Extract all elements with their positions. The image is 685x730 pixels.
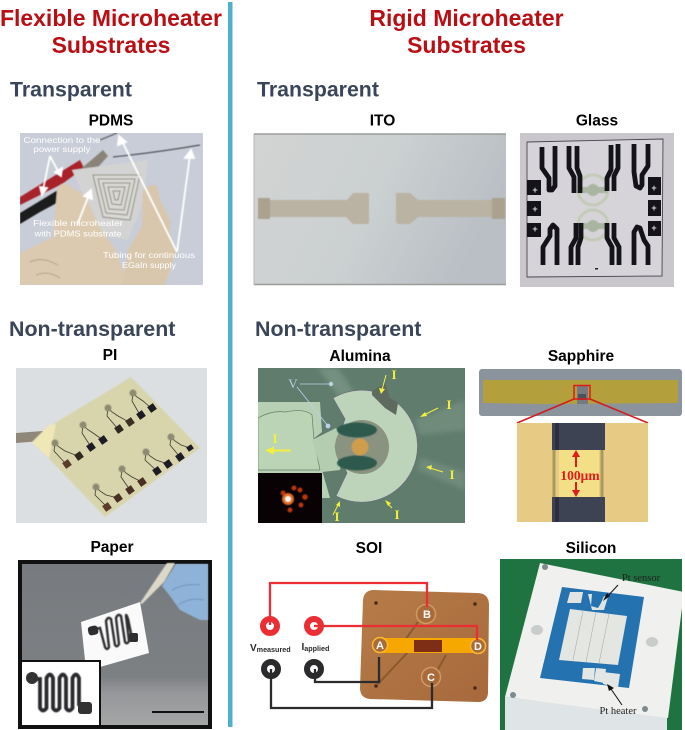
label: Silicon: Silicon (566, 540, 616, 557)
label: ITO: ITO (370, 112, 395, 130)
SOI I applied label: I (302, 642, 304, 653)
photo: silicon microheater (500, 559, 684, 730)
photo: glass microheater: + (532, 204, 538, 214)
SOI I applied label: applied (304, 644, 329, 653)
photo: alumina microheater: I (334, 509, 340, 524)
heading: non-transparent (rigid): Non-transparent (255, 317, 421, 341)
SOI chip (360, 590, 489, 702)
photo: PDMS microheater: with PDMS substrate (33, 228, 122, 238)
title: flexible microheater substrates: Flexible Microheater (0, 5, 222, 31)
photo: glass microheater: + (651, 183, 657, 193)
sapphire scale label: 100μm (560, 468, 600, 483)
photo: sapphire zoomed detail (517, 386, 648, 522)
photo: silicon microheater: Pt sensor (622, 573, 661, 584)
SOI V measured label: V (250, 643, 257, 654)
label: Alumina: Alumina (329, 348, 391, 365)
title: rigid microheater substrates: Substrates (407, 32, 526, 58)
photo: glass microheater: + (532, 224, 538, 234)
title: rigid microheater substrates: Rigid Microheater (369, 5, 564, 31)
SOI terminals (263, 619, 321, 676)
SOI wiring (270, 583, 477, 708)
heading: transparent (flexible): Transparent (10, 78, 132, 102)
photo: sapphire chip overview (479, 369, 682, 416)
photo: glass microheater: + (651, 203, 657, 213)
photo: glass microheater: + (532, 185, 538, 195)
SOI diagram (250, 583, 489, 708)
SOI node letters: D (474, 641, 482, 653)
label: Sapphire: Sapphire (548, 348, 615, 365)
photo: glass microheater: + (651, 223, 657, 233)
photo: alumina microheater: I (391, 367, 397, 382)
SOI V measured label: measured (257, 645, 291, 654)
photo: PDMS microheater (20, 133, 203, 285)
photo: PDMS microheater: EGaIn supply (122, 260, 177, 270)
SOI node letters (376, 609, 482, 684)
title: flexible microheater substrates: Substrates (52, 32, 170, 58)
title: rigid microheater substrates (369, 5, 564, 58)
photo: alumina microheater: I (394, 507, 400, 522)
divider line (228, 2, 232, 727)
title: flexible microheater substrates (0, 5, 222, 58)
photo: silicon microheater: Pt heater (599, 706, 637, 717)
photo: alumina microheater: I (446, 397, 452, 412)
alumina voltage label: V (288, 376, 298, 391)
label: PDMS: PDMS (89, 112, 133, 130)
heading: non-transparent (flexible): Non-transparent (9, 317, 175, 341)
photo: PDMS microheater: Connection to the (24, 135, 101, 145)
SOI node letters: A (376, 640, 384, 652)
photo: alumina microheater: I (272, 431, 278, 446)
label: Glass: Glass (576, 112, 618, 130)
label: Paper: Paper (90, 539, 134, 556)
photo: alumina microheater (258, 367, 465, 524)
label: SOI: SOI (356, 540, 382, 557)
photo: glass microheater (520, 133, 674, 287)
label: PI: PI (103, 347, 117, 364)
photo: PI microheater (16, 368, 207, 523)
photo: alumina microheater: I (449, 467, 455, 482)
photo: PDMS microheater: power supply (34, 144, 91, 154)
SOI node letters: C (427, 672, 435, 684)
photo: ITO microheater (253, 133, 510, 287)
SOI node letters: B (423, 609, 431, 621)
photo: PDMS microheater: Flexible microheater (33, 218, 123, 228)
photo: PDMS microheater: Tubing for continuous (103, 250, 195, 260)
heading: transparent (rigid): Transparent (257, 78, 379, 102)
photo: paper microheater (18, 560, 212, 729)
